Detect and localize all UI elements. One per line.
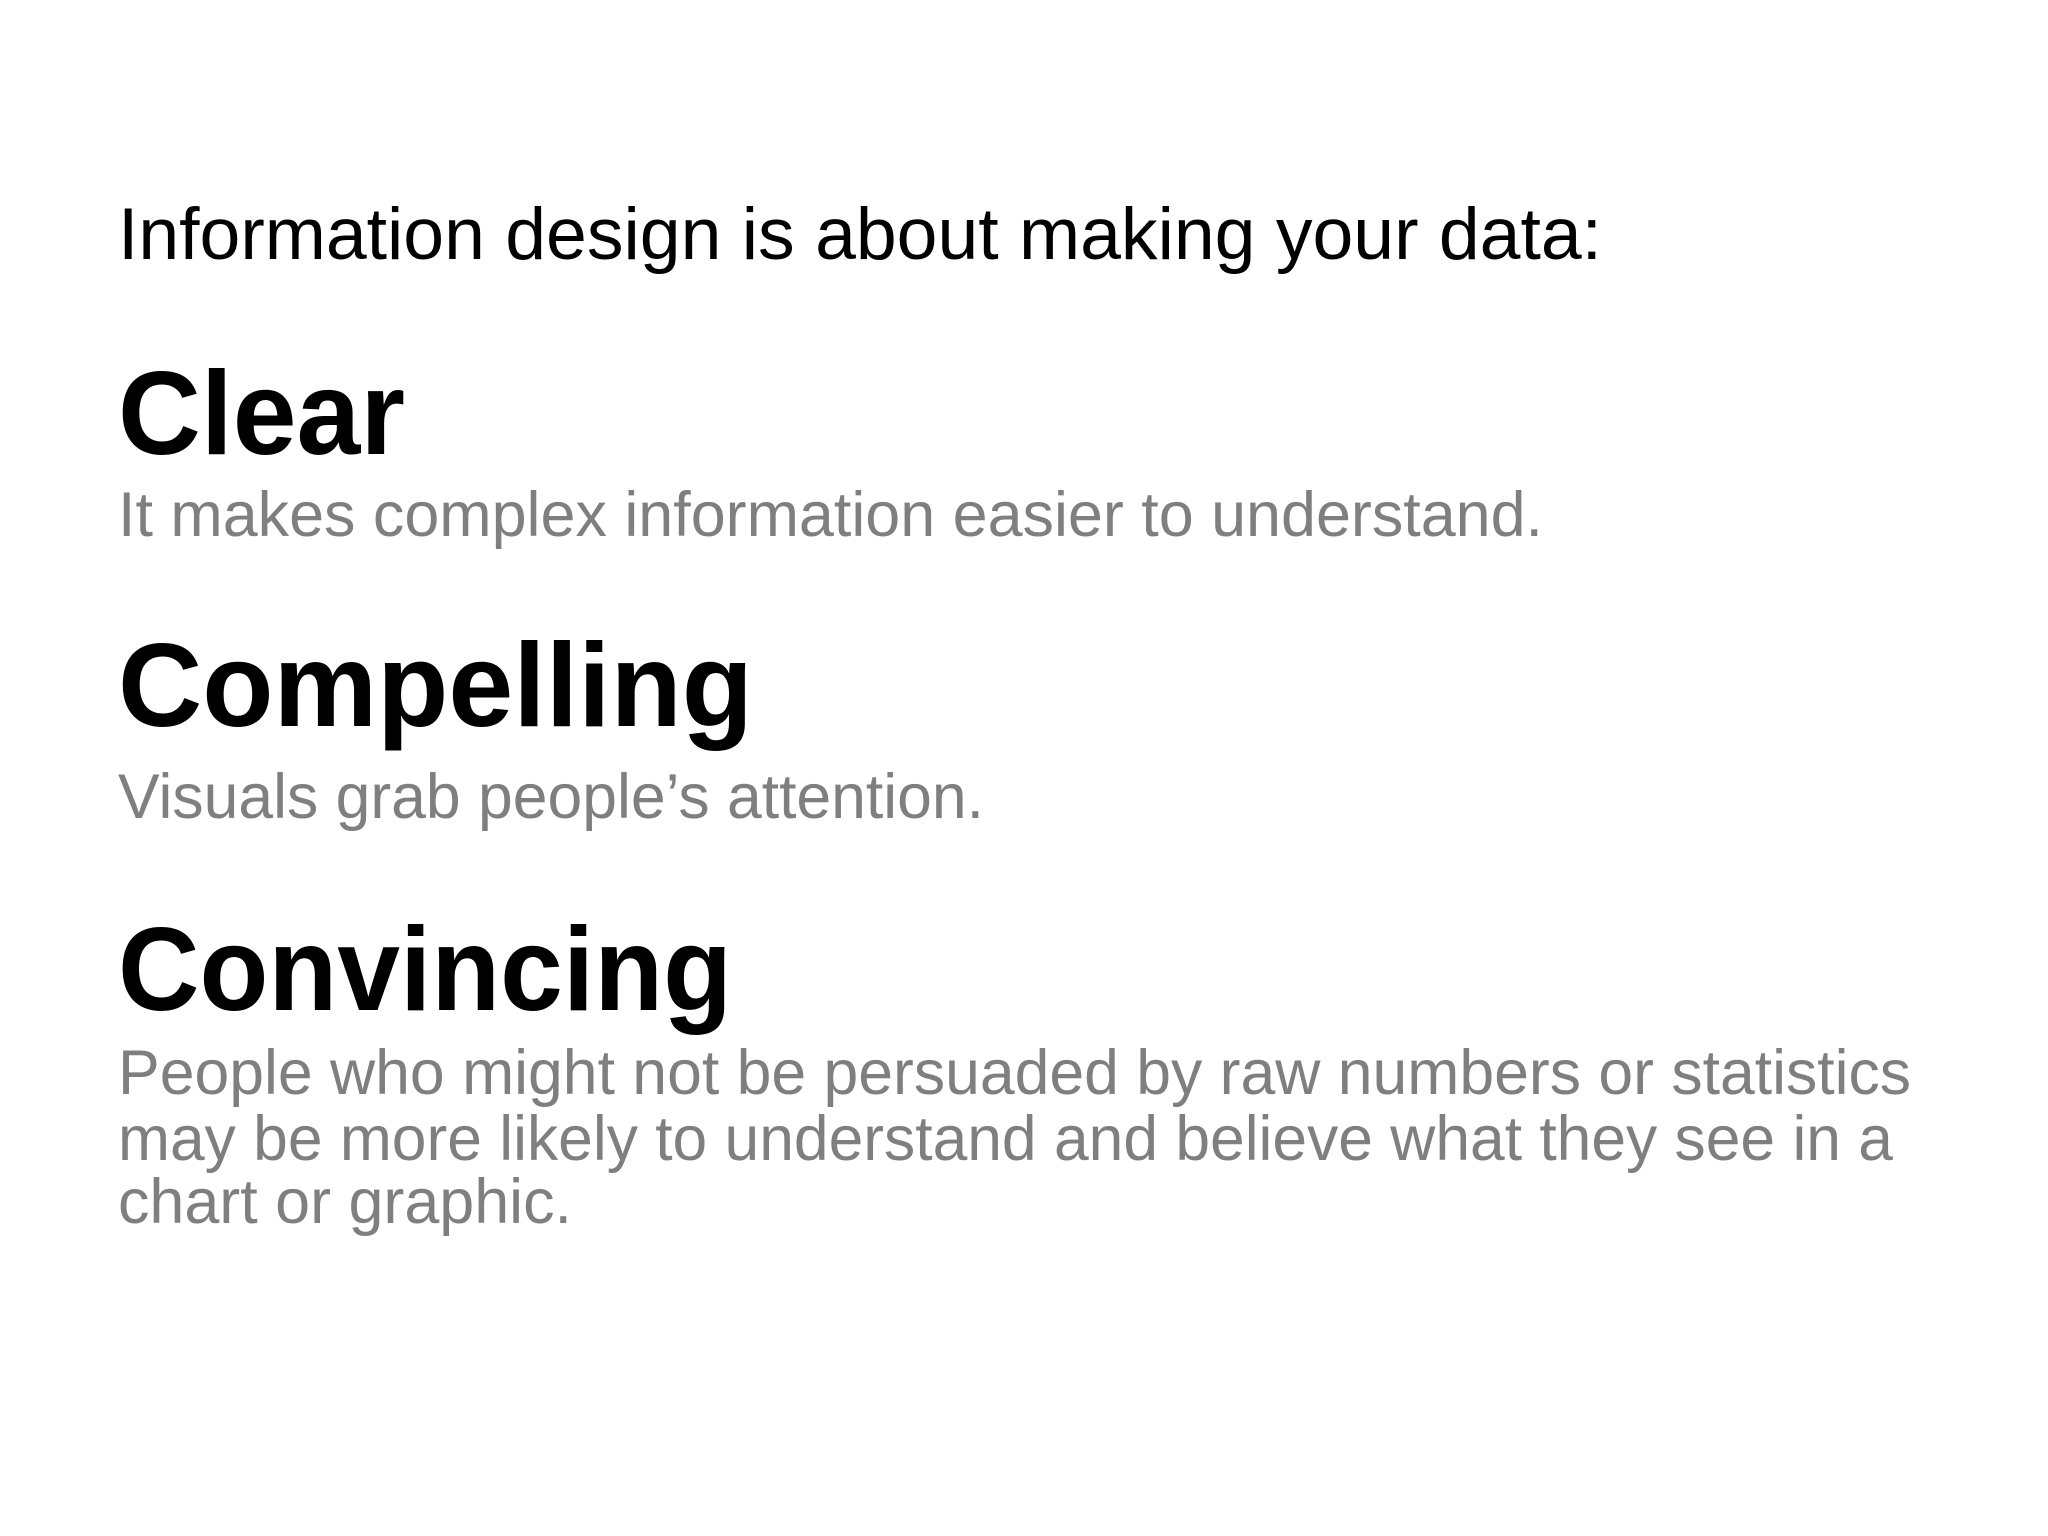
text: convincing description: People who might not be persuaded by raw numbers or statistics	[118, 1038, 1911, 1108]
text: compelling description: Visuals grab people’s attention.	[118, 762, 984, 832]
section: compelling	[118, 619, 984, 832]
section: convincing	[118, 903, 1911, 1237]
heading: Compelling: Compelling	[118, 619, 753, 752]
text: clear description: It makes complex information easier to understand.	[118, 480, 1543, 550]
section: clear	[118, 347, 1543, 550]
title: Information design is about making your data:	[118, 194, 1602, 275]
heading: Convincing: Convincing	[118, 903, 732, 1036]
heading: Clear: Clear	[118, 347, 405, 480]
text: convincing description	[118, 1038, 1911, 1237]
text: convincing description: chart or graphic.	[118, 1167, 572, 1237]
text: convincing description: may be more likely to understand and believe what they see in a	[118, 1104, 1894, 1174]
